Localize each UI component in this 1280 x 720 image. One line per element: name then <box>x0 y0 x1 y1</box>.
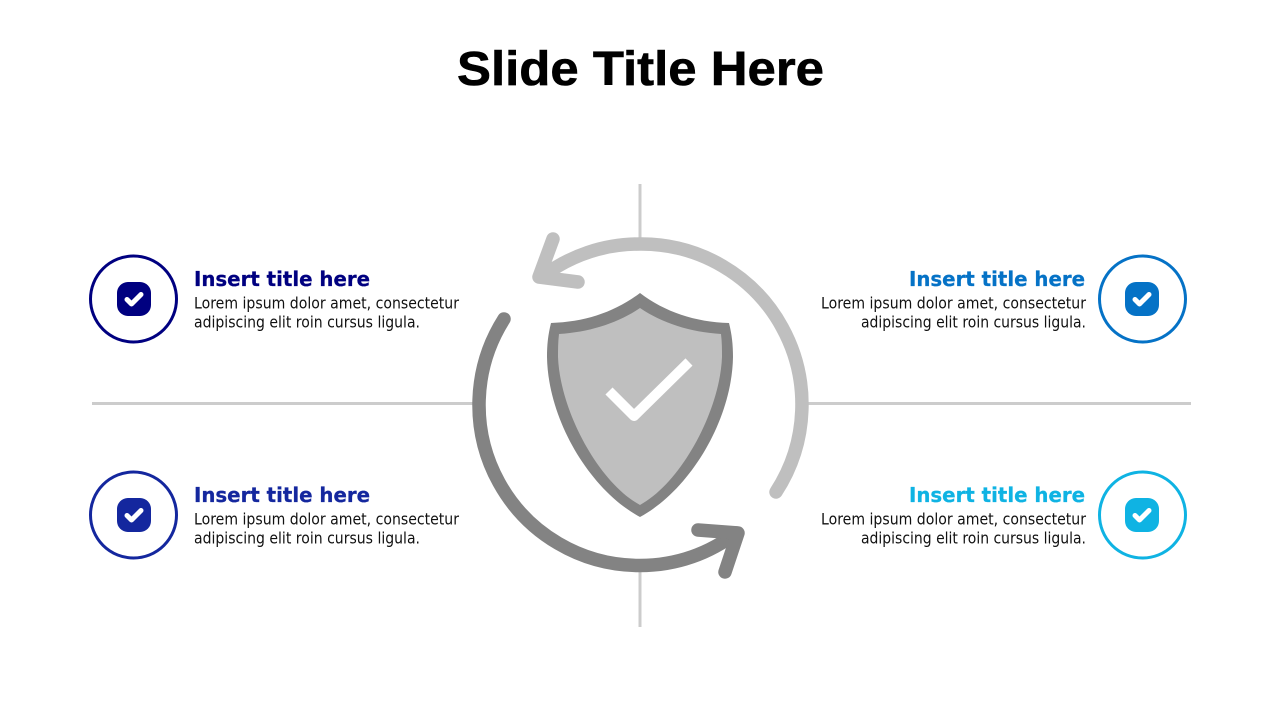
text block: adipiscing elit roin cursus ligula. <box>861 528 1086 548</box>
heading: Insert title here <box>909 267 1085 291</box>
text block: adipiscing elit roin cursus ligula. <box>861 312 1086 332</box>
text block: Lorem ipsum dolor amet, consectetur <box>194 294 459 312</box>
heading: Insert title here <box>194 483 370 507</box>
text block: Lorem ipsum dolor amet, consectetur <box>821 510 1086 528</box>
icon: shield check mark <box>609 362 689 416</box>
text block: adipiscing elit roin cursus ligula. <box>194 528 420 548</box>
text block: Lorem ipsum dolor amet, consectetur <box>821 294 1086 312</box>
item: bottom left <box>90 472 459 558</box>
text block: adipiscing elit roin cursus ligula. <box>194 312 420 332</box>
icon: blue check badge <box>90 472 176 558</box>
item: top left <box>90 256 459 342</box>
heading: Insert title here <box>909 483 1085 507</box>
icon: shield with circular arrows <box>479 239 802 572</box>
icon: mid blue check badge <box>1100 256 1186 342</box>
icon: shield <box>547 293 733 517</box>
title: Slide Title Here <box>457 43 824 96</box>
icon: cyan check badge <box>1100 472 1186 558</box>
icon: navy check badge <box>90 256 176 342</box>
text block: Lorem ipsum dolor amet, consectetur <box>194 510 459 528</box>
item: bottom right <box>821 472 1186 558</box>
item: top right <box>821 256 1186 342</box>
arrow: dark circular arrow <box>479 319 738 572</box>
heading: Insert title here <box>194 267 370 291</box>
arrow: light circular arrow <box>539 239 802 492</box>
